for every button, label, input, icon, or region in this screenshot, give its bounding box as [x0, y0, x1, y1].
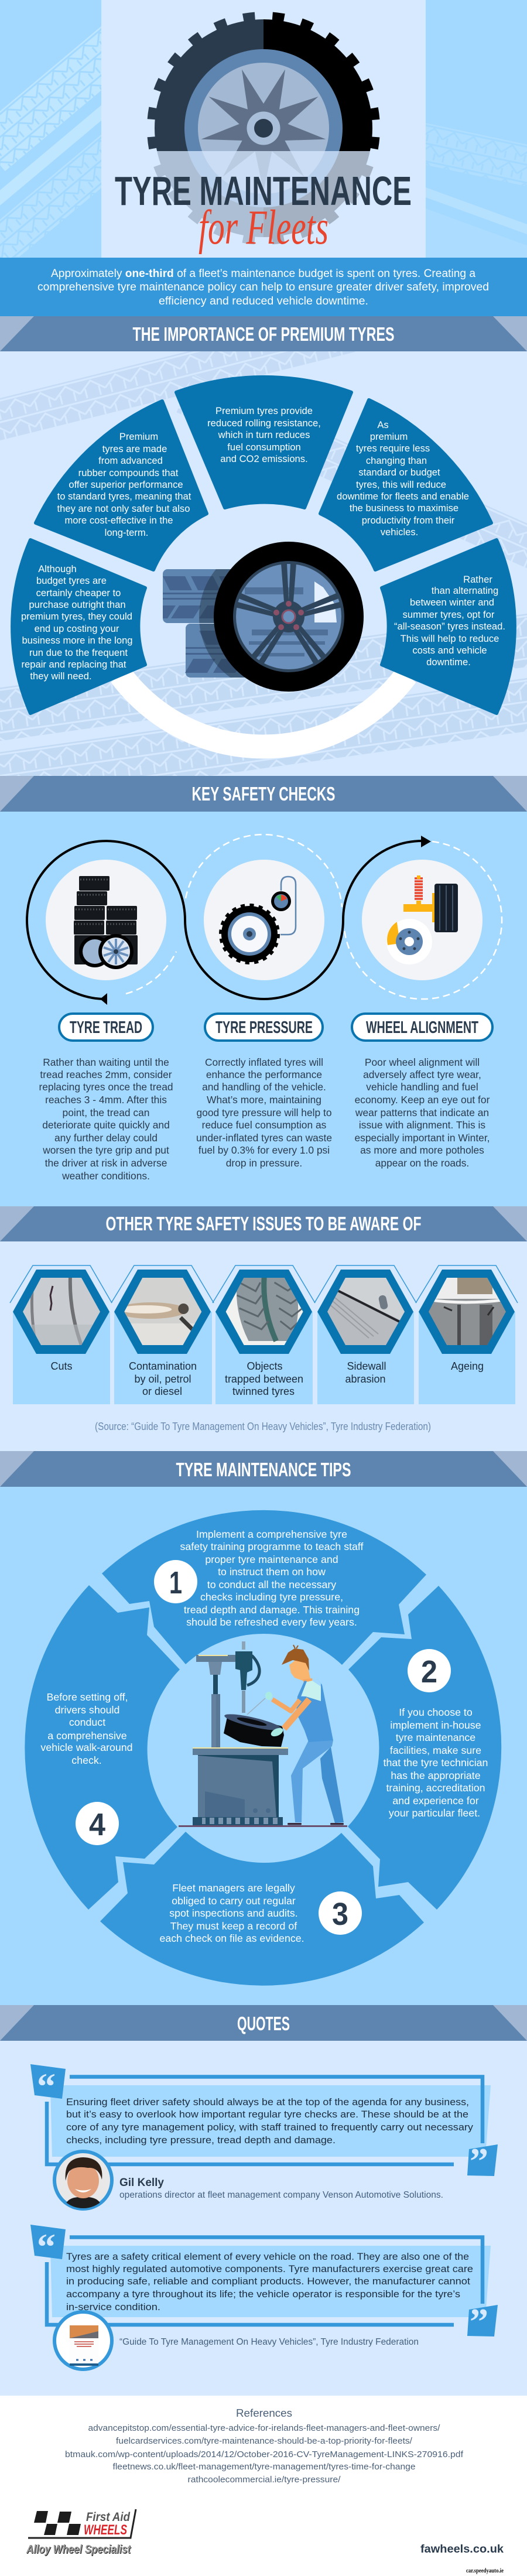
quote 2: accompany a tyre throughout its life; the vehicle operator is responsible for the tyre’s	[66, 2288, 460, 2300]
section heading: tyre maintenance tips: TYRE MAINTENANCE TIPS	[176, 1459, 351, 1480]
quote 1: core of any tyre management policy, with staff trained to frequently carry out necessary	[66, 2122, 474, 2133]
panel: premium segment top: fuel consumption	[227, 442, 301, 453]
card: sidewall abrasion: Sidewall	[347, 1360, 386, 1372]
text: tyre tread: weather conditions.	[61, 1170, 150, 1182]
quote 2: in producing safe, reliable and compliant products. However, the manufacturer cannot	[66, 2276, 470, 2287]
quote 1: “	[37, 2065, 56, 2107]
panel: tip 4: drivers should	[55, 1704, 119, 1716]
text: tyre pressure: reduce fuel consumption as	[202, 1119, 327, 1131]
panel: tip 3: Fleet managers are legally	[172, 1882, 295, 1894]
icon: stacked tyres	[74, 876, 138, 969]
text: tyre pressure: good tyre pressure will help to	[196, 1107, 332, 1118]
card: contamination: Contamination	[129, 1360, 197, 1372]
white ring	[121, 675, 406, 747]
label pill: tyre tread	[59, 1014, 153, 1041]
panel: premium segment left: premium tyres, they could	[21, 611, 132, 622]
text: tyre tread: any further delay could	[54, 1132, 158, 1144]
panel: premium segment upper right: tyres require less	[356, 443, 430, 454]
panel: tips background	[0, 1487, 527, 2005]
quote 1	[30, 2064, 498, 2182]
panel: tip 1: checks including tyre pressure,	[200, 1591, 343, 1603]
text: tyre pressure: Correctly inflated tyres will	[205, 1056, 323, 1068]
quote 2	[30, 2225, 498, 2342]
icon: tyre machine	[179, 1641, 347, 1827]
intro band: Approximately one-third of a fleet’s maintenance budget is spent on tyres. Creating a	[51, 267, 475, 280]
text: wheel alignment: as more and more potholes	[360, 1144, 484, 1156]
panel: quotes background	[0, 2041, 527, 2396]
panel: tip 3: obliged to carry out regular	[172, 1895, 296, 1907]
card: objects: Objects	[247, 1360, 283, 1372]
quote 1: checks, including tyre pressure, tread depth and damage.	[66, 2134, 336, 2146]
panel: tip 4: conduct	[69, 1716, 105, 1728]
panel: tip 4: a comprehensive	[47, 1730, 127, 1742]
panel: tip 2: and experience for	[392, 1795, 479, 1807]
panel: premium segment upper left: they are not only safer but also	[57, 503, 190, 514]
panel: key safety checks background	[0, 812, 527, 1206]
panel: premium segment upper right	[320, 400, 491, 570]
card: objects	[213, 1265, 315, 1404]
label pill: wheel alignment	[352, 1014, 492, 1041]
panel: premium segment left: business more in the long	[22, 635, 133, 646]
panel: premium segment top: and CO2 emissions.	[220, 453, 308, 464]
panel: premium segment upper left: to standard tyres, meaning that	[57, 491, 191, 502]
references: References	[236, 2407, 292, 2419]
panel: premium segment top	[176, 377, 351, 508]
references: fleetnews.co.uk/fleet-management/tyre-management/tyres-time-for-change	[112, 2462, 416, 2472]
label pill: tyre pressure	[205, 1014, 323, 1041]
card: sidewall abrasion: abrasion	[345, 1373, 386, 1385]
section heading: other tyre safety issues	[0, 1206, 527, 1241]
panel: tip 2: If you choose to	[399, 1706, 473, 1718]
text: wheel alignment: issue with alignment. This is	[359, 1119, 485, 1131]
panel: premium segment upper right: premium	[370, 431, 408, 442]
panel: premium segment upper right: changing than	[366, 455, 427, 466]
panel: tip 2: your particular fleet.	[389, 1807, 480, 1819]
text: tyre tread: reaches 3 - 4mm. After this	[45, 1094, 167, 1106]
panel: premium segment top: reduced rolling resistance,	[207, 418, 321, 429]
panel: tip 1: to instruct them on how	[218, 1566, 326, 1578]
panel: tip 3: 3	[332, 1897, 348, 1932]
panel: premium segment upper left: rubber compounds that	[78, 467, 179, 478]
card: objects: trapped between	[225, 1373, 303, 1385]
text: tyre pressure: What’s more, maintaining	[207, 1094, 321, 1106]
panel: premium segment left: they will need.	[30, 670, 92, 682]
panel: premium segment upper left: more cost-effective in the	[64, 515, 173, 526]
references: advancepitstop.com/essential-tyre-advice-for-irelands-fleet-managers-and-fleet-owners/	[88, 2423, 440, 2433]
text: wheel alignment: appear on the roads.	[375, 1157, 469, 1169]
panel: premium segment upper right: the business to maximise	[350, 502, 458, 514]
text: tyre tread: point, the tread can	[63, 1107, 149, 1118]
text: wheel alignment: wear patterns that indicate an	[355, 1107, 489, 1118]
section heading: quotes: QUOTES	[237, 2013, 290, 2034]
panel: premium segment upper right: downtime for fleets and enable	[337, 491, 469, 502]
panel: premium segment right: Rather	[463, 574, 492, 585]
panel: tip 3	[100, 1832, 424, 1986]
icon: technician	[247, 1645, 344, 1825]
panel: tip 4: vehicle walk-around	[40, 1742, 133, 1753]
card: ageing: Ageing	[451, 1360, 484, 1372]
attribution: Gil Kelly: operations director at fleet management company Venson Automotive Solutions.	[119, 2190, 443, 2200]
panel: tip 1: 1	[169, 1565, 182, 1600]
title	[115, 168, 412, 255]
panel: premium segment upper right: tyres, this will reduce	[356, 479, 446, 490]
panel: tip 3: each check on file as evidence.	[159, 1932, 304, 1944]
panel: tip 2: facilities, make sure	[390, 1744, 481, 1756]
panel: tip 2: implement in-house	[390, 1719, 481, 1731]
logo: First Aid Wheels: Alloy Wheel Specialist	[26, 2544, 132, 2557]
panel: premium segment left: purchase outright than	[29, 599, 126, 610]
panel: tip 1: should be refreshed every few years.	[186, 1616, 357, 1628]
panel: premium segment left: repair and replacing that	[22, 659, 126, 670]
text: tyre pressure: under-inflated tyres can waste	[196, 1132, 332, 1144]
panel: premium segment upper right: standard or budget	[358, 467, 440, 478]
title: TYRE MAINTENANCE	[115, 168, 412, 214]
text: tyre pressure: and handling of the vehicle.	[202, 1081, 326, 1093]
card: cuts: Cuts	[50, 1360, 73, 1372]
references: btmauk.com/wp-content/uploads/2014/12/October-2016-CV-TyreManagement-LINKS-270916.pdf	[65, 2450, 464, 2459]
panel: premium segment upper left	[36, 401, 207, 570]
arrow: serpentine path	[27, 836, 431, 1005]
credit: car.speedyauto.ie	[466, 2568, 504, 2574]
card: objects: twinned tyres	[232, 1386, 295, 1397]
panel: premium segment top: Premium tyres provide	[215, 405, 313, 416]
panel: premium segment right: between winter and	[410, 597, 494, 608]
panel: tip 2: training, accreditation	[386, 1782, 485, 1794]
text: wheel alignment: vehicle handling and fuel	[366, 1081, 478, 1093]
quote 2: Tyres are a safety critical element of every vehicle on the road. They are also one of the	[66, 2251, 469, 2262]
quote 2: ”	[470, 2301, 488, 2342]
panel: tip 4	[25, 1585, 180, 1910]
portrait: Gil Kelly	[54, 2151, 112, 2209]
panel: tip 1: tread depth and damage. This training	[184, 1604, 360, 1616]
text: wheel alignment: especially important in Winter,	[354, 1132, 490, 1144]
panel: premium segment upper right: productivity from their	[362, 515, 455, 526]
logo: First Aid Wheels: WHEELS	[84, 2522, 127, 2538]
panel: premium segment upper left: long-term.	[105, 527, 148, 538]
panel: tip 2: has the appropriate	[391, 1770, 481, 1781]
references: fuelcardservices.com/tyre-maintenance-should-be-a-top-priority-for-fleets/	[116, 2436, 413, 2446]
title: for Fleets	[199, 200, 328, 255]
panel: tip 1: proper tyre maintenance and	[205, 1554, 338, 1565]
website: fawheels.co.uk	[420, 2543, 504, 2556]
panel: tip 2	[348, 1586, 501, 1910]
section heading: the importance of premium tyres: THE IMPORTANCE OF PREMIUM TYRES	[132, 323, 395, 345]
section heading: tyre maintenance tips	[0, 1451, 527, 1487]
text: wheel alignment: economy. Keep an eye out for	[355, 1094, 490, 1106]
intro band: efficiency and reduced vehicle downtime.	[159, 295, 368, 307]
panel: tip 4: check.	[71, 1754, 102, 1766]
panel: premium segment right: downtime.	[426, 656, 471, 668]
references: rathcoolecommercial.ie/tyre-pressure/	[187, 2475, 341, 2485]
quote 1: but it’s easy to overlook how important regular tyre checks are. These should be at the	[66, 2109, 468, 2120]
panel: premium segment upper left: offer superior performance	[69, 479, 183, 490]
section heading: key safety checks	[0, 776, 527, 812]
panel: premium segment upper left: Premium	[119, 431, 158, 442]
panel: premium segment left	[12, 540, 145, 713]
text: tyre tread: deteriorate quite quickly and	[42, 1119, 170, 1131]
quote 2: in-service condition.	[66, 2301, 160, 2312]
logo: First Aid Wheels: Alloy Wheel Specialist	[26, 2543, 131, 2556]
panel: premium segment left: budget tyres are	[36, 575, 107, 586]
intro band	[0, 258, 527, 316]
section heading: quotes	[0, 2005, 527, 2041]
panel: premium segment right: This will help to reduce	[401, 633, 499, 644]
panel: premium segment top: which in turn reduces	[218, 429, 310, 440]
section heading: the importance of premium tyres	[0, 316, 527, 351]
logo: First Aid Wheels	[26, 2509, 136, 2557]
panel: premium segment right: costs and vehicle	[412, 645, 487, 656]
card: contamination: by oil, petrol	[134, 1373, 191, 1385]
text: tyre pressure: enhance the performance	[206, 1069, 322, 1080]
label pill: tyre tread: TYRE TREAD	[70, 1018, 142, 1037]
text: tyre tread: tread reaches 2mm, consider	[40, 1069, 172, 1080]
text: wheel alignment: adversely affect tyre wear,	[363, 1069, 481, 1080]
card: contamination: or diesel	[142, 1386, 182, 1397]
panel: premium segment upper right: vehicles.	[381, 526, 418, 538]
attribution: guide: “Guide To Tyre Management On Heavy Vehicles”, Tyre Industry Federation	[119, 2337, 419, 2347]
card: contamination	[111, 1265, 214, 1404]
panel: other issues background	[0, 1241, 527, 1451]
panel: importance background	[0, 351, 527, 776]
panel: premium segment left: certainly cheaper to	[36, 587, 121, 598]
attribution: Gil Kelly	[119, 2177, 443, 2200]
quote 2: “	[37, 2226, 56, 2267]
panel: premium segment right: summer tyres, opt for	[403, 609, 495, 620]
panel: premium segment left: end up costing your	[35, 623, 119, 634]
icon: wheel alignment	[385, 875, 458, 964]
panel: premium segment upper left: tyres are made	[102, 443, 167, 454]
panel: premium segment right: than alternating	[432, 585, 498, 596]
intro band: comprehensive tyre maintenance policy can help to ensure greater driver safety, improved	[37, 280, 489, 293]
text: tyre tread: replacing tyres once the tread	[39, 1081, 173, 1093]
panel: tip 1: Implement a comprehensive tyre	[196, 1528, 347, 1540]
references	[65, 2407, 464, 2485]
icon: tyre pressure gauge	[221, 877, 296, 962]
text: tyre tread: the driver at risk in adverse	[45, 1157, 167, 1169]
icon circle backgrounds	[46, 860, 482, 980]
quote 2: most highly regulated automotive components. Tyre manufacturers exercise great care	[66, 2263, 473, 2274]
card: ageing	[416, 1265, 518, 1404]
text: tyre tread: worsen the tyre grip and put	[42, 1144, 169, 1156]
panel: tip 2: that the tyre technician	[384, 1757, 488, 1768]
text: tyre pressure: fuel by 0.3% for every 1.0 psi	[199, 1144, 330, 1156]
dashed connectors	[126, 834, 502, 999]
text: tyre pressure: drop in pressure.	[226, 1157, 302, 1169]
panel: premium segment left: Although	[38, 563, 77, 574]
label pill: tyre pressure: TYRE PRESSURE	[215, 1018, 313, 1037]
source note: (Source: “Guide To Tyre Management On Heavy Vehicles”, Tyre Industry Federation)	[95, 1421, 431, 1432]
panel: tip 1: to conduct all the necessary	[207, 1579, 336, 1590]
panel: tip 1: safety training programme to teach staff	[180, 1541, 364, 1552]
section heading: key safety checks: KEY SAFETY CHECKS	[192, 783, 335, 805]
logo: First Aid Wheels: First Aid	[86, 2510, 131, 2524]
panel: premium segment upper left: from advanced	[98, 455, 163, 466]
panel: premium segment right: “all-season” tyres instead.	[394, 621, 505, 632]
quote 1: Ensuring fleet driver safety should always be at the top of the agenda for any business,	[66, 2096, 469, 2108]
panel: premium segment right	[382, 540, 515, 713]
panel: tip 3: They must keep a record of	[170, 1920, 297, 1932]
text: tyre tread: Rather than waiting until the	[43, 1056, 169, 1068]
icon: header tyre	[148, 12, 379, 245]
panel: tip 1	[102, 1510, 426, 1665]
card: cuts	[10, 1265, 112, 1404]
panel: tip 2: 2	[421, 1654, 437, 1689]
text: wheel alignment: Poor wheel alignment will	[365, 1056, 480, 1068]
icon: guide booklet	[54, 2312, 112, 2369]
panel: tip 3: spot inspections and audits.	[169, 1907, 298, 1919]
card: sidewall abrasion	[314, 1265, 416, 1404]
attribution: Gil Kelly: Gil Kelly	[119, 2177, 164, 2189]
icon: wheel and stacked tyres	[163, 542, 364, 692]
quote 1: ”	[470, 2140, 488, 2182]
panel: tip 4: 4	[89, 1807, 105, 1842]
panel: tip 4: Before setting off,	[46, 1691, 128, 1703]
panel: header background	[0, 0, 527, 258]
panel: tip 2: tyre maintenance	[396, 1732, 475, 1743]
panel: premium segment upper right: As	[377, 419, 389, 430]
panel: premium segment left: run due to the frequent	[29, 647, 128, 658]
